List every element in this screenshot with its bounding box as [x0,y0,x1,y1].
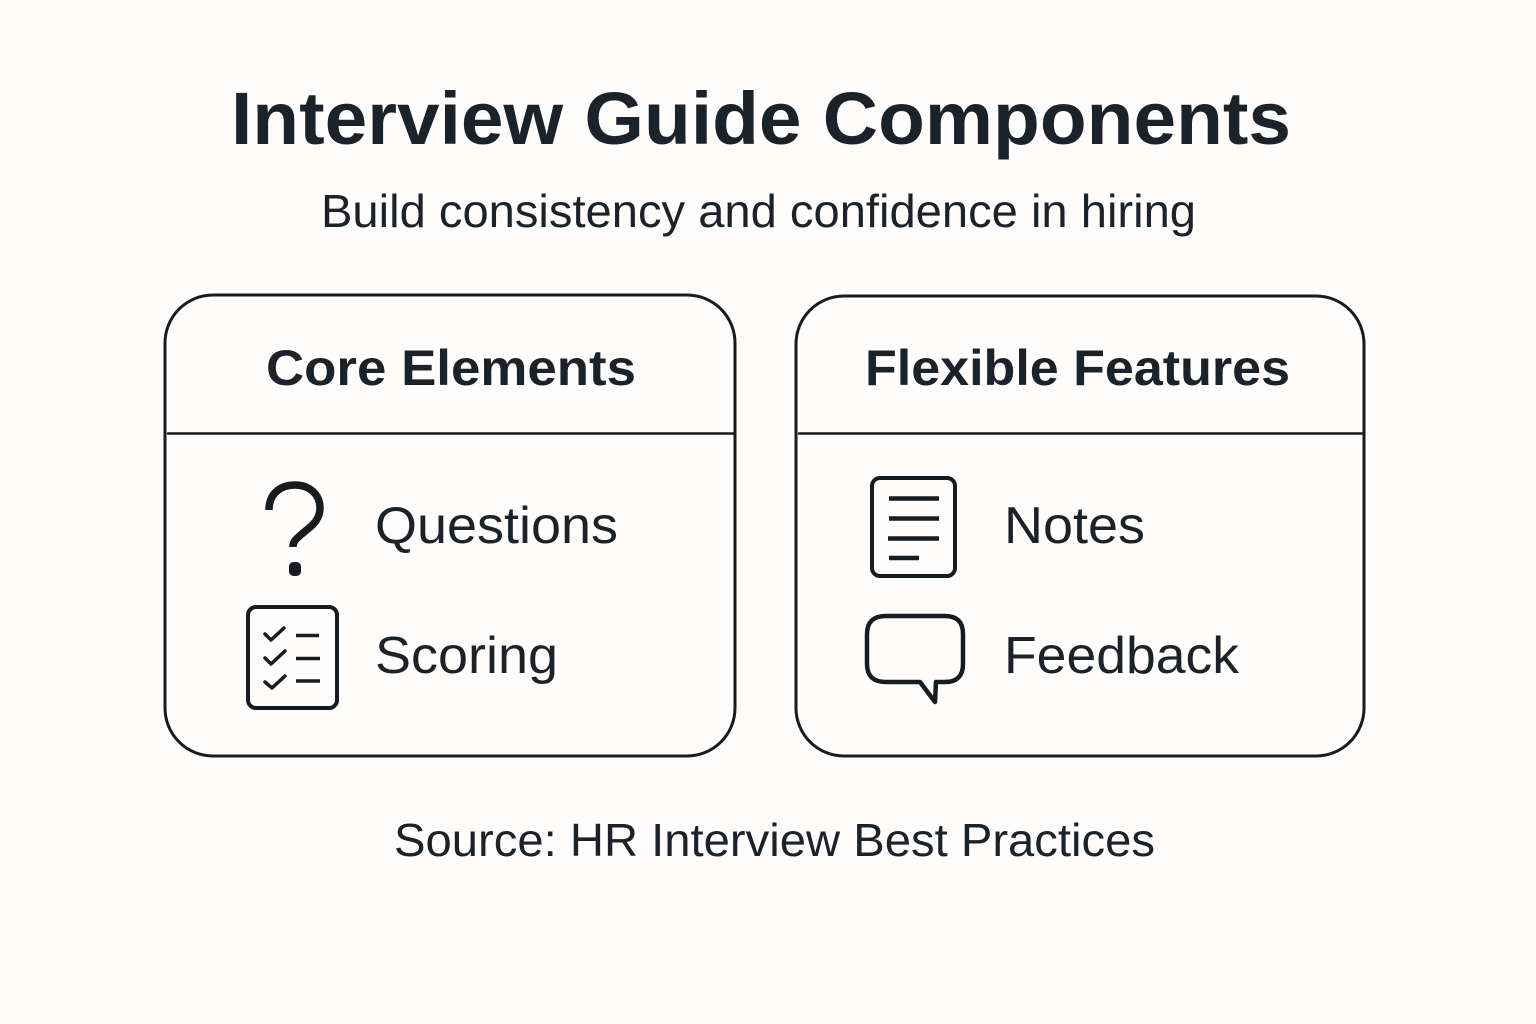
panel heading: core elements: Core Elements [266,340,636,396]
divider: core elements header [168,432,734,435]
panel: core elements [165,295,735,756]
label: questions: Questions [375,497,618,555]
title: Interview Guide Components [231,77,1291,160]
label: notes: Notes [1004,497,1145,555]
panel heading: flexible features: Flexible Features [865,340,1290,396]
source note: Source: HR Interview Best Practices [394,814,1155,866]
panel: flexible features [796,296,1364,756]
label: feedback: Feedback [1004,627,1240,685]
icon: question mark [269,485,320,576]
divider: flexible features header [799,432,1363,435]
icon: feedback speech bubble [867,616,963,702]
panel outline: core elements [165,295,735,756]
icon: notes document [872,478,955,576]
panel outline: flexible features [796,296,1364,756]
subtitle: Build consistency and confidence in hiring [321,185,1196,237]
icon: scoring checklist [248,607,337,708]
label: scoring: Scoring [375,627,558,685]
